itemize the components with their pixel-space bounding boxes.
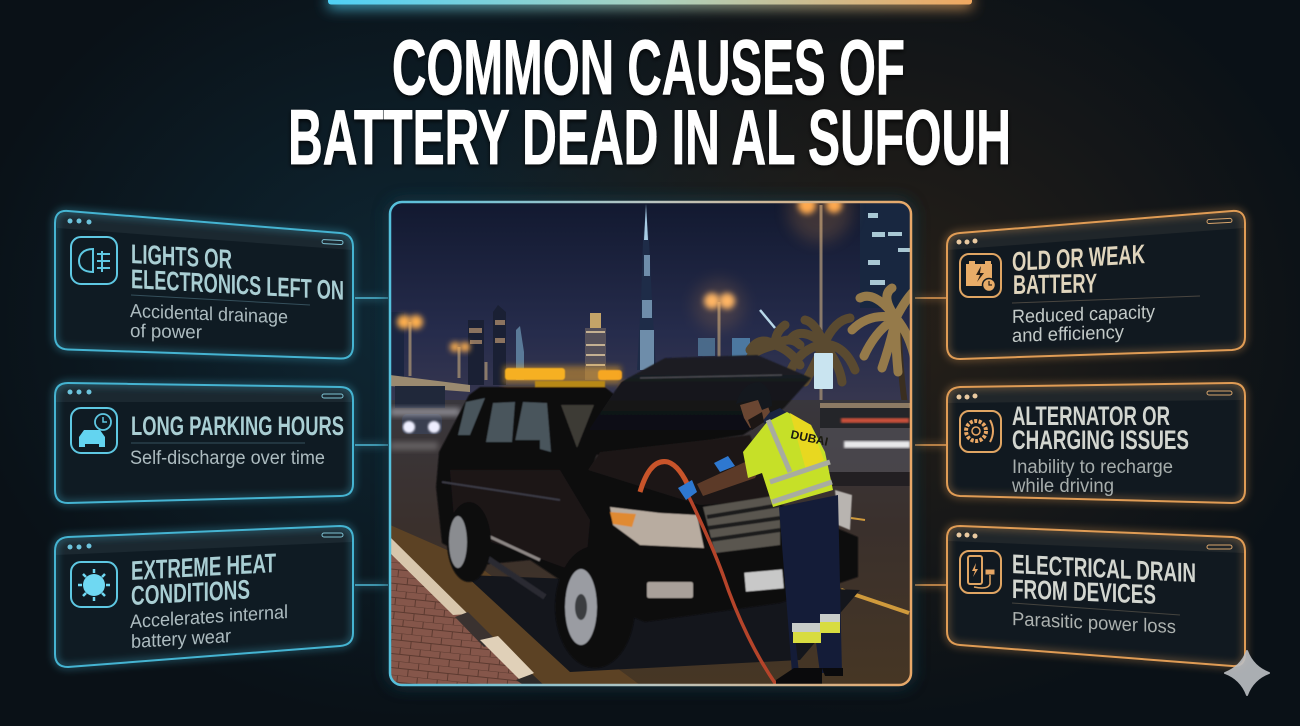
- description: Reduced capacity: [1012, 302, 1155, 328]
- title: COMMON CAUSES OF: [392, 23, 905, 111]
- description: while driving: [1011, 476, 1114, 497]
- panel: lights or electronics left on: [55, 211, 353, 359]
- vest: [743, 412, 833, 507]
- windows: [458, 398, 594, 452]
- plate: [744, 569, 784, 592]
- car shadow: [465, 575, 860, 672]
- arm: [697, 462, 763, 496]
- icon: sparkle watermark: [1225, 651, 1269, 695]
- gloves: [678, 480, 697, 500]
- description: Inability to recharge: [1012, 457, 1173, 478]
- heading: ALTERNATOR OR: [1012, 401, 1170, 431]
- panel: extreme heat conditions: [55, 526, 353, 667]
- chrome trim: [490, 534, 542, 562]
- icon: alternator: [960, 411, 1001, 452]
- roof light bars: [503, 366, 622, 387]
- description: Self-discharge over time: [130, 448, 325, 469]
- description: Parasitic power loss: [1012, 609, 1176, 638]
- jump cable: [689, 497, 777, 686]
- heading: ELECTRONICS LEFT ON: [131, 264, 344, 306]
- collar: [764, 408, 786, 424]
- fog lamp: [647, 582, 693, 598]
- icon: car with clock: [71, 408, 117, 453]
- photo: roadside battery assistance at night: [388, 178, 915, 690]
- head: [740, 398, 770, 428]
- trousers: [779, 495, 842, 673]
- headlight: [610, 507, 704, 548]
- heading: CHARGING ISSUES: [1012, 425, 1189, 455]
- heading: CONDITIONS: [131, 574, 250, 611]
- description: [130, 602, 288, 653]
- heading: [131, 239, 344, 306]
- vest lettering: DUBAI: [789, 427, 829, 449]
- tower right: [860, 203, 912, 308]
- billboard: [814, 353, 833, 389]
- connector lines: [355, 298, 947, 585]
- skyline: [390, 204, 775, 385]
- heading: OLD OR WEAK: [1012, 239, 1145, 277]
- lane marking: [841, 590, 909, 613]
- night sky: [391, 203, 910, 400]
- heading: ELECTRICAL DRAIN: [1012, 549, 1196, 588]
- heading: EXTREME HEAT: [131, 548, 276, 586]
- description: [130, 301, 288, 343]
- description: Accelerates internal: [130, 602, 288, 633]
- open hood: [574, 355, 811, 455]
- description: [1012, 302, 1155, 347]
- grille: [703, 495, 780, 553]
- photo frame: [390, 202, 911, 685]
- icon: headlight: [71, 237, 117, 284]
- far side road and traffic: [390, 375, 911, 486]
- heading: [131, 548, 276, 611]
- icon: sun: [71, 562, 117, 607]
- description: and efficiency: [1012, 322, 1124, 347]
- description: battery wear: [131, 626, 232, 653]
- icon: battery with clock: [960, 254, 1001, 297]
- wheels: [447, 502, 635, 668]
- icon: phone and plug: [960, 551, 1001, 593]
- title: [288, 23, 1011, 181]
- panel: old or weak battery: [947, 211, 1245, 359]
- heading: [1012, 401, 1189, 455]
- heading: LIGHTS OR: [131, 239, 232, 275]
- description: of power: [130, 321, 203, 343]
- description: [1011, 457, 1173, 497]
- description: Accidental drainage: [130, 301, 288, 328]
- road: [390, 400, 911, 685]
- car: [436, 355, 858, 668]
- body: [436, 387, 858, 622]
- heading: BATTERY: [1013, 268, 1097, 300]
- palm trees: [750, 288, 915, 405]
- heading: LONG PARKING HOURS: [131, 411, 344, 441]
- panel: long parking hours: [55, 383, 353, 503]
- boots: [776, 668, 843, 684]
- gutter: [390, 525, 640, 685]
- panel: electrical drain from devices: [947, 526, 1245, 666]
- heading: [1012, 549, 1196, 610]
- worker: [640, 382, 843, 686]
- heading: [1012, 239, 1145, 300]
- panel: alternator or charging issues: [947, 383, 1245, 503]
- engine bay: [588, 435, 775, 505]
- street lamps: [392, 203, 858, 400]
- side mirror: [514, 440, 540, 450]
- top accent bar: [328, 0, 972, 8]
- heading: FROM DEVICES: [1012, 574, 1156, 610]
- sidewalk: [390, 537, 548, 690]
